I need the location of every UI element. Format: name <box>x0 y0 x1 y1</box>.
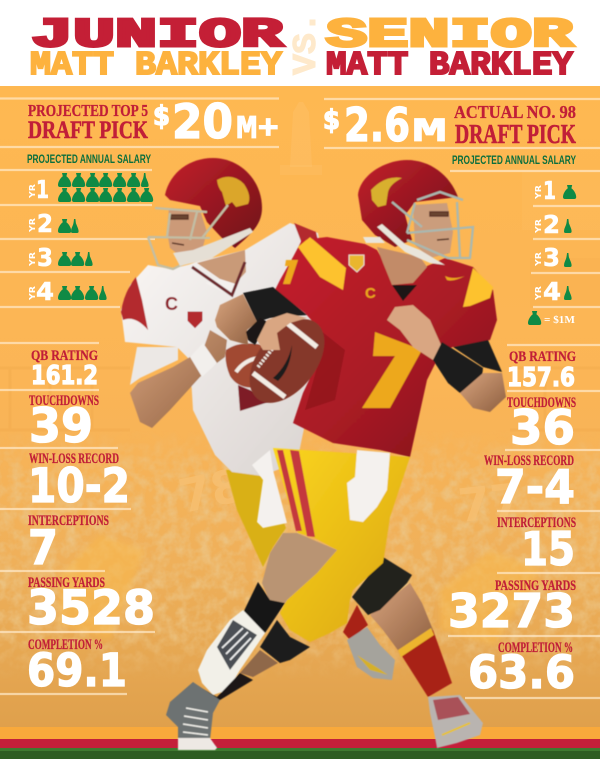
chin strap <box>173 228 253 266</box>
stat: interceptions: 15 <box>521 522 575 576</box>
helmet logo <box>217 177 249 207</box>
stat: win-loss record: WIN-LOSS RECORD <box>29 451 119 467</box>
stat: passing yards: PASSING YARDS <box>28 575 105 591</box>
gold pants <box>273 448 410 642</box>
jersey c and patch: C <box>165 294 178 314</box>
year 2 salary: bag <box>534 210 572 239</box>
year 2 salary: bags <box>28 209 79 238</box>
stat: qb rating: QB RATING <box>509 349 576 365</box>
year 4 salary: bags: YR <box>28 286 37 301</box>
rear leg pants <box>226 468 286 567</box>
year 4 salary: bags <box>28 277 107 306</box>
neck <box>377 247 427 285</box>
year 3 salary: bag: 3 <box>543 243 560 272</box>
title: senior: MATT BARKLEY <box>326 47 573 84</box>
white jersey <box>121 223 330 476</box>
facemask <box>148 205 228 269</box>
stat: completion percentage: COMPLETION % <box>28 637 103 653</box>
eye shadow and mouth <box>170 215 188 245</box>
year 3 salary: bags <box>28 243 93 272</box>
stat: completion percentage: 69.1 <box>27 644 127 697</box>
year 4 salary: bag: 4 <box>543 277 561 306</box>
helmet <box>165 158 262 248</box>
stat: qb rating: QB RATING <box>31 348 98 364</box>
front leg <box>262 533 337 603</box>
stat: touchdowns: 39 <box>29 399 93 454</box>
stat: win-loss record: 7-4 <box>495 460 575 514</box>
pants red stripes <box>277 450 315 537</box>
rear shoe <box>343 605 395 680</box>
left draft heading <box>28 101 148 144</box>
year 2 salary: bag: YR <box>534 219 543 234</box>
stat: passing yards: 3273 <box>448 584 575 638</box>
faded stadium background: 78 <box>174 458 248 524</box>
right forearm <box>460 373 506 412</box>
jersey shading <box>305 330 345 410</box>
white towel behind <box>252 450 287 528</box>
year 3 salary: bags: YR <box>28 252 37 267</box>
helmet logo <box>371 178 402 207</box>
left salary chart: PROJECTED ANNUAL SALARY <box>27 154 151 166</box>
legend: bag equals one million <box>528 311 576 326</box>
arm sleeve <box>130 347 178 385</box>
year 4 salary: bags: 4 <box>36 277 54 306</box>
divider lines <box>0 98 600 698</box>
undershirt <box>392 285 417 301</box>
shoulder stripes <box>298 237 493 307</box>
face <box>413 203 453 258</box>
eye shadow and mouth <box>430 212 449 240</box>
stat: touchdowns: TOUCHDOWNS <box>29 393 99 409</box>
right hand <box>387 305 442 360</box>
stat: touchdowns: 36 <box>510 401 575 456</box>
player: senior in red jersey <box>166 160 506 750</box>
football <box>235 305 339 417</box>
jersey number 7 <box>362 332 422 408</box>
right draft amount: 2.6 <box>344 98 410 152</box>
year 1 salary: bags: YR <box>28 184 37 199</box>
left draft heading: PROJECTED TOP 5 <box>28 101 148 120</box>
stat: interceptions: INTERCEPTIONS <box>28 513 109 529</box>
left draft amount: $ <box>153 101 170 132</box>
black sleeves <box>243 287 502 372</box>
lower leg and knee brace <box>193 620 310 705</box>
left draft amount: 20 <box>172 95 233 150</box>
year 3 salary: bag <box>534 243 572 272</box>
hand <box>257 313 307 350</box>
year 4 salary: bag <box>534 277 572 306</box>
jersey c and patch <box>165 294 203 329</box>
right draft heading <box>454 102 576 149</box>
stat: completion percentage: 63.6 <box>468 646 575 699</box>
left salary chart <box>27 154 153 306</box>
white shoe with laces <box>198 610 265 695</box>
facemask <box>392 192 473 258</box>
title: junior: MATT BARKLEY <box>30 47 282 84</box>
sock and shoe <box>398 628 483 748</box>
title: senior <box>326 13 574 84</box>
wristband <box>246 318 268 345</box>
year 3 salary: bag: YR <box>534 252 543 267</box>
year 2 salary: bag: 2 <box>543 210 560 239</box>
right draft amount <box>323 98 447 152</box>
rear leg with knee brace <box>343 557 483 748</box>
year 3 salary: bags: 3 <box>37 243 53 272</box>
year 1 salary: bag <box>534 176 576 205</box>
vs: VS. <box>288 12 325 75</box>
helmet <box>358 160 458 247</box>
right salary chart <box>452 155 576 326</box>
chin strap <box>363 224 445 265</box>
rear football <box>226 343 264 388</box>
title: junior <box>30 13 284 84</box>
year 4 salary: bag: YR <box>534 286 543 301</box>
jersey shoulder red panels <box>121 223 318 330</box>
forearm wrap <box>433 342 483 393</box>
shadow under ball <box>238 385 275 411</box>
right draft amount: M <box>412 114 447 152</box>
legend: bag equals one million: = $1M <box>544 314 576 326</box>
bottom stripes and turf <box>0 727 600 759</box>
faded stadium background: 77 <box>456 473 525 533</box>
left draft amount: M+ <box>236 111 279 148</box>
left stats column <box>27 348 155 697</box>
stat: passing yards: 3528 <box>27 581 155 636</box>
wristband <box>190 343 217 377</box>
left draft heading: DRAFT PICK <box>28 117 148 144</box>
towel <box>347 450 390 522</box>
right draft amount: $ <box>323 105 340 136</box>
stat: qb rating: 161.2 <box>31 361 98 391</box>
year 1 salary: bag: 1 <box>543 176 556 205</box>
stat: interceptions <box>497 515 576 576</box>
dark cleat <box>166 682 220 750</box>
year 1 salary: bags <box>28 173 153 204</box>
year 1 salary: bag: YR <box>534 185 543 200</box>
faded stadium background <box>0 102 600 680</box>
jersey c, logo and swoosh <box>349 255 465 302</box>
title: junior: JUNIOR <box>31 13 284 59</box>
sleeve number <box>283 260 298 284</box>
stat: qb rating <box>507 349 576 393</box>
red jersey <box>275 237 497 457</box>
left arm <box>215 294 257 345</box>
jersey c, logo and swoosh: C <box>365 285 376 302</box>
stat: qb rating <box>31 348 98 391</box>
right draft heading: ACTUAL NO. 98 <box>454 102 576 122</box>
stat: interceptions <box>28 513 109 576</box>
stat: win-loss record: 10-2 <box>28 459 130 514</box>
year 2 salary: bags: YR <box>28 218 37 233</box>
arm <box>130 330 227 428</box>
title: senior: SENIOR <box>326 13 574 59</box>
year 1 salary: bags: 1 <box>36 175 49 204</box>
black sock <box>243 582 285 633</box>
face <box>167 208 207 256</box>
year 2 salary: bags: 2 <box>37 209 53 238</box>
stat: interceptions: 7 <box>28 521 58 576</box>
player: junior in white jersey <box>121 158 330 567</box>
right stats column <box>448 349 576 699</box>
stat: qb rating: 157.6 <box>507 363 575 393</box>
left draft amount <box>153 95 279 150</box>
jersey neck and collar <box>192 250 246 296</box>
